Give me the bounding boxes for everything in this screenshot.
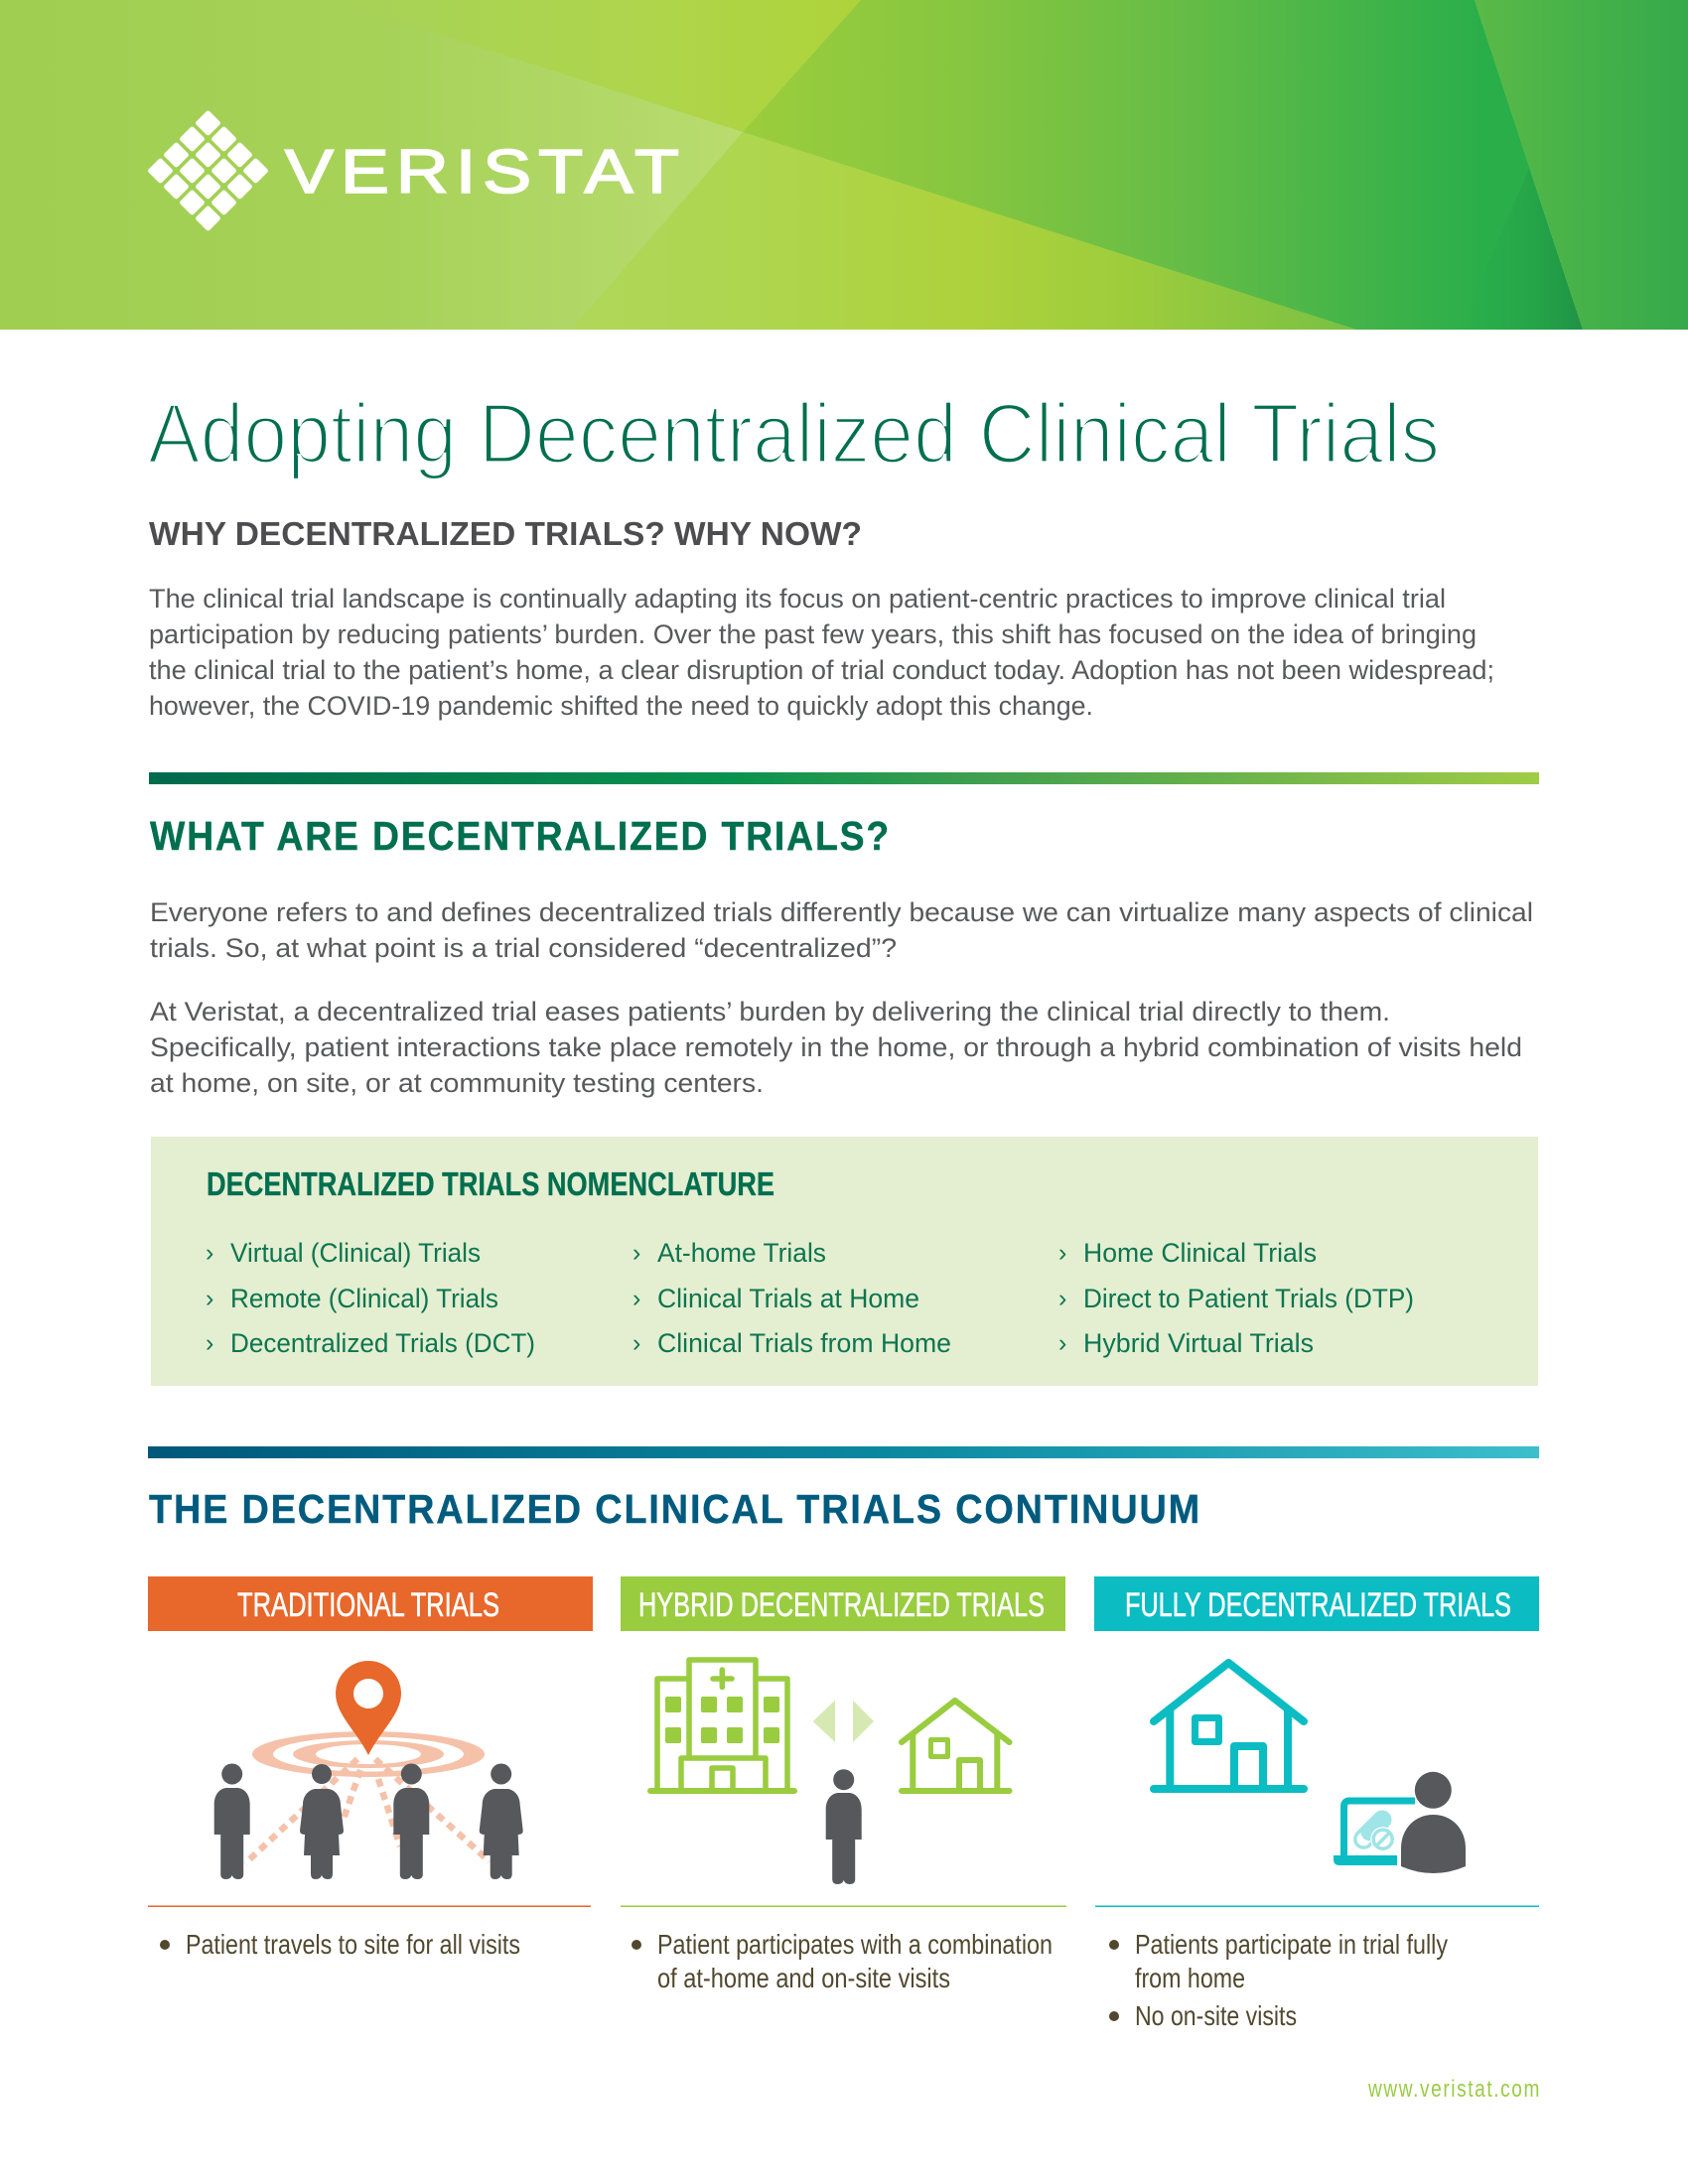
list column 1: Virtual (Clinical) Trials [230, 1238, 481, 1268]
icon: person 1 [214, 1763, 250, 1879]
heading: why decentralized trials: WHY DECENTRALIZED TRIALS? WHY NOW? [149, 515, 862, 552]
dashed paths to site [245, 1759, 490, 1863]
list column 2: › [633, 1239, 640, 1267]
heading: continuum: THE DECENTRALIZED CLINICAL TRIALS CONTINUUM [149, 1486, 1201, 1532]
bullet text: Patient travels to site for all visits [186, 1929, 520, 1960]
icon: two-way arrows [813, 1701, 874, 1742]
text block: clinical trial landscape [149, 584, 1494, 721]
column header: HYBRID DECENTRALIZED TRIALS [638, 1586, 1045, 1624]
list column 1: › [206, 1285, 213, 1312]
bullet text [632, 1929, 1053, 1993]
panel heading: DECENTRALIZED TRIALS NOMENCLATURE [207, 1165, 774, 1202]
icon: hospital [650, 1660, 794, 1791]
text block: at Veristat: Specifically, patient interactions take place remotely in the home, or through a hybrid combination of visits held [150, 1032, 1522, 1062]
icon: person 3 [393, 1763, 429, 1879]
text block: clinical trial landscape: The clinical trial landscape is continually adapting its focus on patient-centric practices to improve clinical trial [149, 584, 1446, 614]
icon: capsule and tablet [1355, 1820, 1395, 1851]
panel: nomenclature [151, 1137, 1538, 1386]
panel: hybrid decentralized trials [621, 1576, 1066, 1993]
rule [148, 1906, 591, 1907]
list column 2: Clinical Trials at Home [657, 1284, 919, 1313]
rule [621, 1906, 1066, 1907]
column header [1094, 1576, 1539, 1631]
list column 2 [633, 1238, 951, 1358]
list column 1: Remote (Clinical) Trials [230, 1284, 498, 1313]
icon: laptop with pills [1334, 1801, 1415, 1865]
list column 3: › [1058, 1239, 1066, 1267]
text block: at Veristat: At Veristat, a decentralized trial eases patients’ burden by delivering the clinical trial directly to them. [150, 997, 1390, 1026]
logo: Veristat [147, 110, 686, 231]
icon: target rings [252, 1731, 485, 1777]
icon: map pin [336, 1661, 401, 1755]
list column 1: Decentralized Trials (DCT) [230, 1328, 535, 1358]
icon: home [902, 1701, 1009, 1791]
column header: FULLY DECENTRALIZED TRIALS [1125, 1586, 1511, 1624]
text block: definition: trials. So, at what point is a trial considered “decentralized”? [150, 933, 897, 963]
icon: person bust [1401, 1772, 1466, 1873]
column header [621, 1576, 1065, 1631]
icon: person 4 [480, 1763, 523, 1879]
list column 3: › [1058, 1285, 1066, 1312]
text block: clinical trial landscape: however, the COVID-19 pandemic shifted the need to quickly adopt this change. [149, 691, 1093, 721]
list column 2: At-home Trials [657, 1238, 826, 1268]
list column 3: Direct to Patient Trials (DTP) [1083, 1284, 1414, 1313]
text block: definition: Everyone refers to and defines decentralized trials differently because we can virtualize many aspects of clinical [150, 897, 1533, 927]
column header [148, 1576, 593, 1631]
icon: home [1154, 1663, 1304, 1789]
list column 1 [206, 1238, 535, 1358]
text block: clinical trial landscape: the clinical trial to the patient’s home, a clear disruption of trial conduct today. Adoption has not been widespread; [149, 655, 1494, 685]
footer url: www.veristat.com [1367, 2076, 1541, 2103]
title: Adopting Decentralized Clinical Trials [148, 387, 1440, 481]
list column 3 [1058, 1238, 1414, 1358]
list column 3: Home Clinical Trials [1083, 1238, 1317, 1268]
text block: definition [150, 897, 1533, 963]
header banner [0, 0, 1688, 330]
icon: diamond grid mark [147, 110, 269, 231]
column header: TRADITIONAL TRIALS [237, 1586, 499, 1624]
text block: clinical trial landscape: participation by reducing patients’ burden. Over the past few years, this shift has focused on the idea of bringing [149, 619, 1477, 649]
list column 1: › [206, 1329, 213, 1357]
bullet text: No on-site visits [1135, 2000, 1297, 2031]
text block: at Veristat: at home, on site, or at community testing centers. [150, 1068, 764, 1098]
bullet text: Patient participates with a combination [657, 1929, 1053, 1960]
divider bar: teal gradient [148, 1446, 1539, 1458]
list column 1: › [206, 1239, 213, 1267]
list column 2: Clinical Trials from Home [657, 1328, 951, 1358]
bullet text: from home [1135, 1963, 1245, 1993]
list column 2: › [633, 1285, 640, 1312]
icon: person 2 [300, 1764, 344, 1879]
text block: at Veristat [150, 997, 1522, 1098]
icon: person [826, 1769, 862, 1884]
list column 2: › [633, 1329, 640, 1357]
bullet text: Patients participate in trial fully [1135, 1929, 1448, 1960]
divider bar: green gradient [149, 772, 1539, 784]
bullet text [1109, 1929, 1448, 2031]
rule [1095, 1906, 1539, 1907]
heading: what are decentralized trials: WHAT ARE DECENTRALIZED TRIALS? [150, 813, 891, 859]
panel: traditional trials [148, 1576, 593, 1960]
panel: fully decentralized trials [1094, 1576, 1539, 2031]
bullet text: of at-home and on-site visits [657, 1963, 950, 1993]
logo wordmark: VERISTAT [285, 138, 686, 206]
list column 3: Hybrid Virtual Trials [1083, 1328, 1314, 1358]
list column 3: › [1058, 1329, 1066, 1357]
